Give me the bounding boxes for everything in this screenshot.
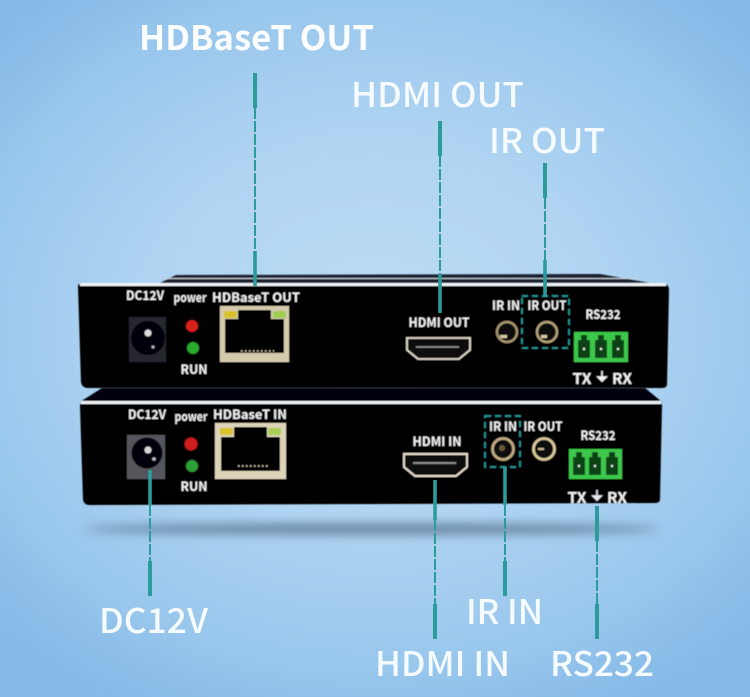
panel: top device (receiver) [78,274,669,389]
bottom device labels: IR IN [489,416,517,435]
icon: power and run LEDs bottom [184,438,198,472]
top device labels: DC12V [126,285,164,304]
icon: RS232 terminal bottom [569,449,622,479]
bottom device labels: IR OUT [524,416,563,435]
icon: RJ45 port bottom [215,423,286,479]
top device labels: RUN [180,359,208,378]
bottom device labels: RUN [180,476,208,495]
label: HDMI OUT: HDMI OUT [351,68,524,117]
leader: DC12V [148,470,152,596]
top device labels: HDBaseT OUT [212,287,300,306]
icon: HDMI port bottom [404,454,467,476]
IR OUT dashed highlight [522,296,569,348]
icon: RJ45 port top [220,306,289,362]
leader: HDMI OUT [438,121,442,313]
device shadow [84,523,660,535]
icon: RS232 terminal top [574,332,628,362]
top device labels: TX [572,368,592,389]
bottom device labels: RS232 [580,425,616,444]
label: DC12V: DC12V [99,594,209,643]
top device labels [126,285,633,389]
icon: HDMI port top [407,338,470,359]
top device labels: IR OUT [528,295,567,314]
label: IR IN: IR IN [466,585,543,634]
bottom device labels: RX [607,487,628,508]
bottom device labels: DC12V [128,404,166,423]
icon: DC jack bottom [127,435,165,479]
icon: IR jacks bottom [492,438,554,460]
icon: DC jack top [129,317,166,362]
top device labels: RX [612,368,633,389]
bottom device labels [128,404,628,508]
label: HDMI IN: HDMI IN [375,637,510,686]
leader: HDMI IN [433,480,437,639]
panel: bottom device (transmitter) [80,388,662,508]
top device labels: IR IN [492,295,520,314]
bottom device labels: HDMI IN [412,431,462,450]
bottom device labels: HDBaseT IN [213,404,287,423]
icon: IR jacks top [497,322,557,342]
leader: IR OUT [543,163,547,297]
label: IR OUT: IR OUT [489,114,605,163]
IR IN dashed highlight [485,416,520,467]
label: RS232: RS232 [550,637,654,686]
top device labels: power [174,287,207,306]
leader: HDBaseT OUT [253,73,257,286]
label: HDBaseT OUT: HDBaseT OUT [139,11,374,60]
bottom device labels: power [174,406,208,425]
leader: RS232 [595,506,599,639]
top device labels: HDMI OUT [408,312,470,331]
icon: power and run LEDs top [186,320,199,354]
top device labels: RS232 [586,304,620,323]
leader: IR IN [503,467,507,596]
bottom device labels: TX [568,487,587,508]
